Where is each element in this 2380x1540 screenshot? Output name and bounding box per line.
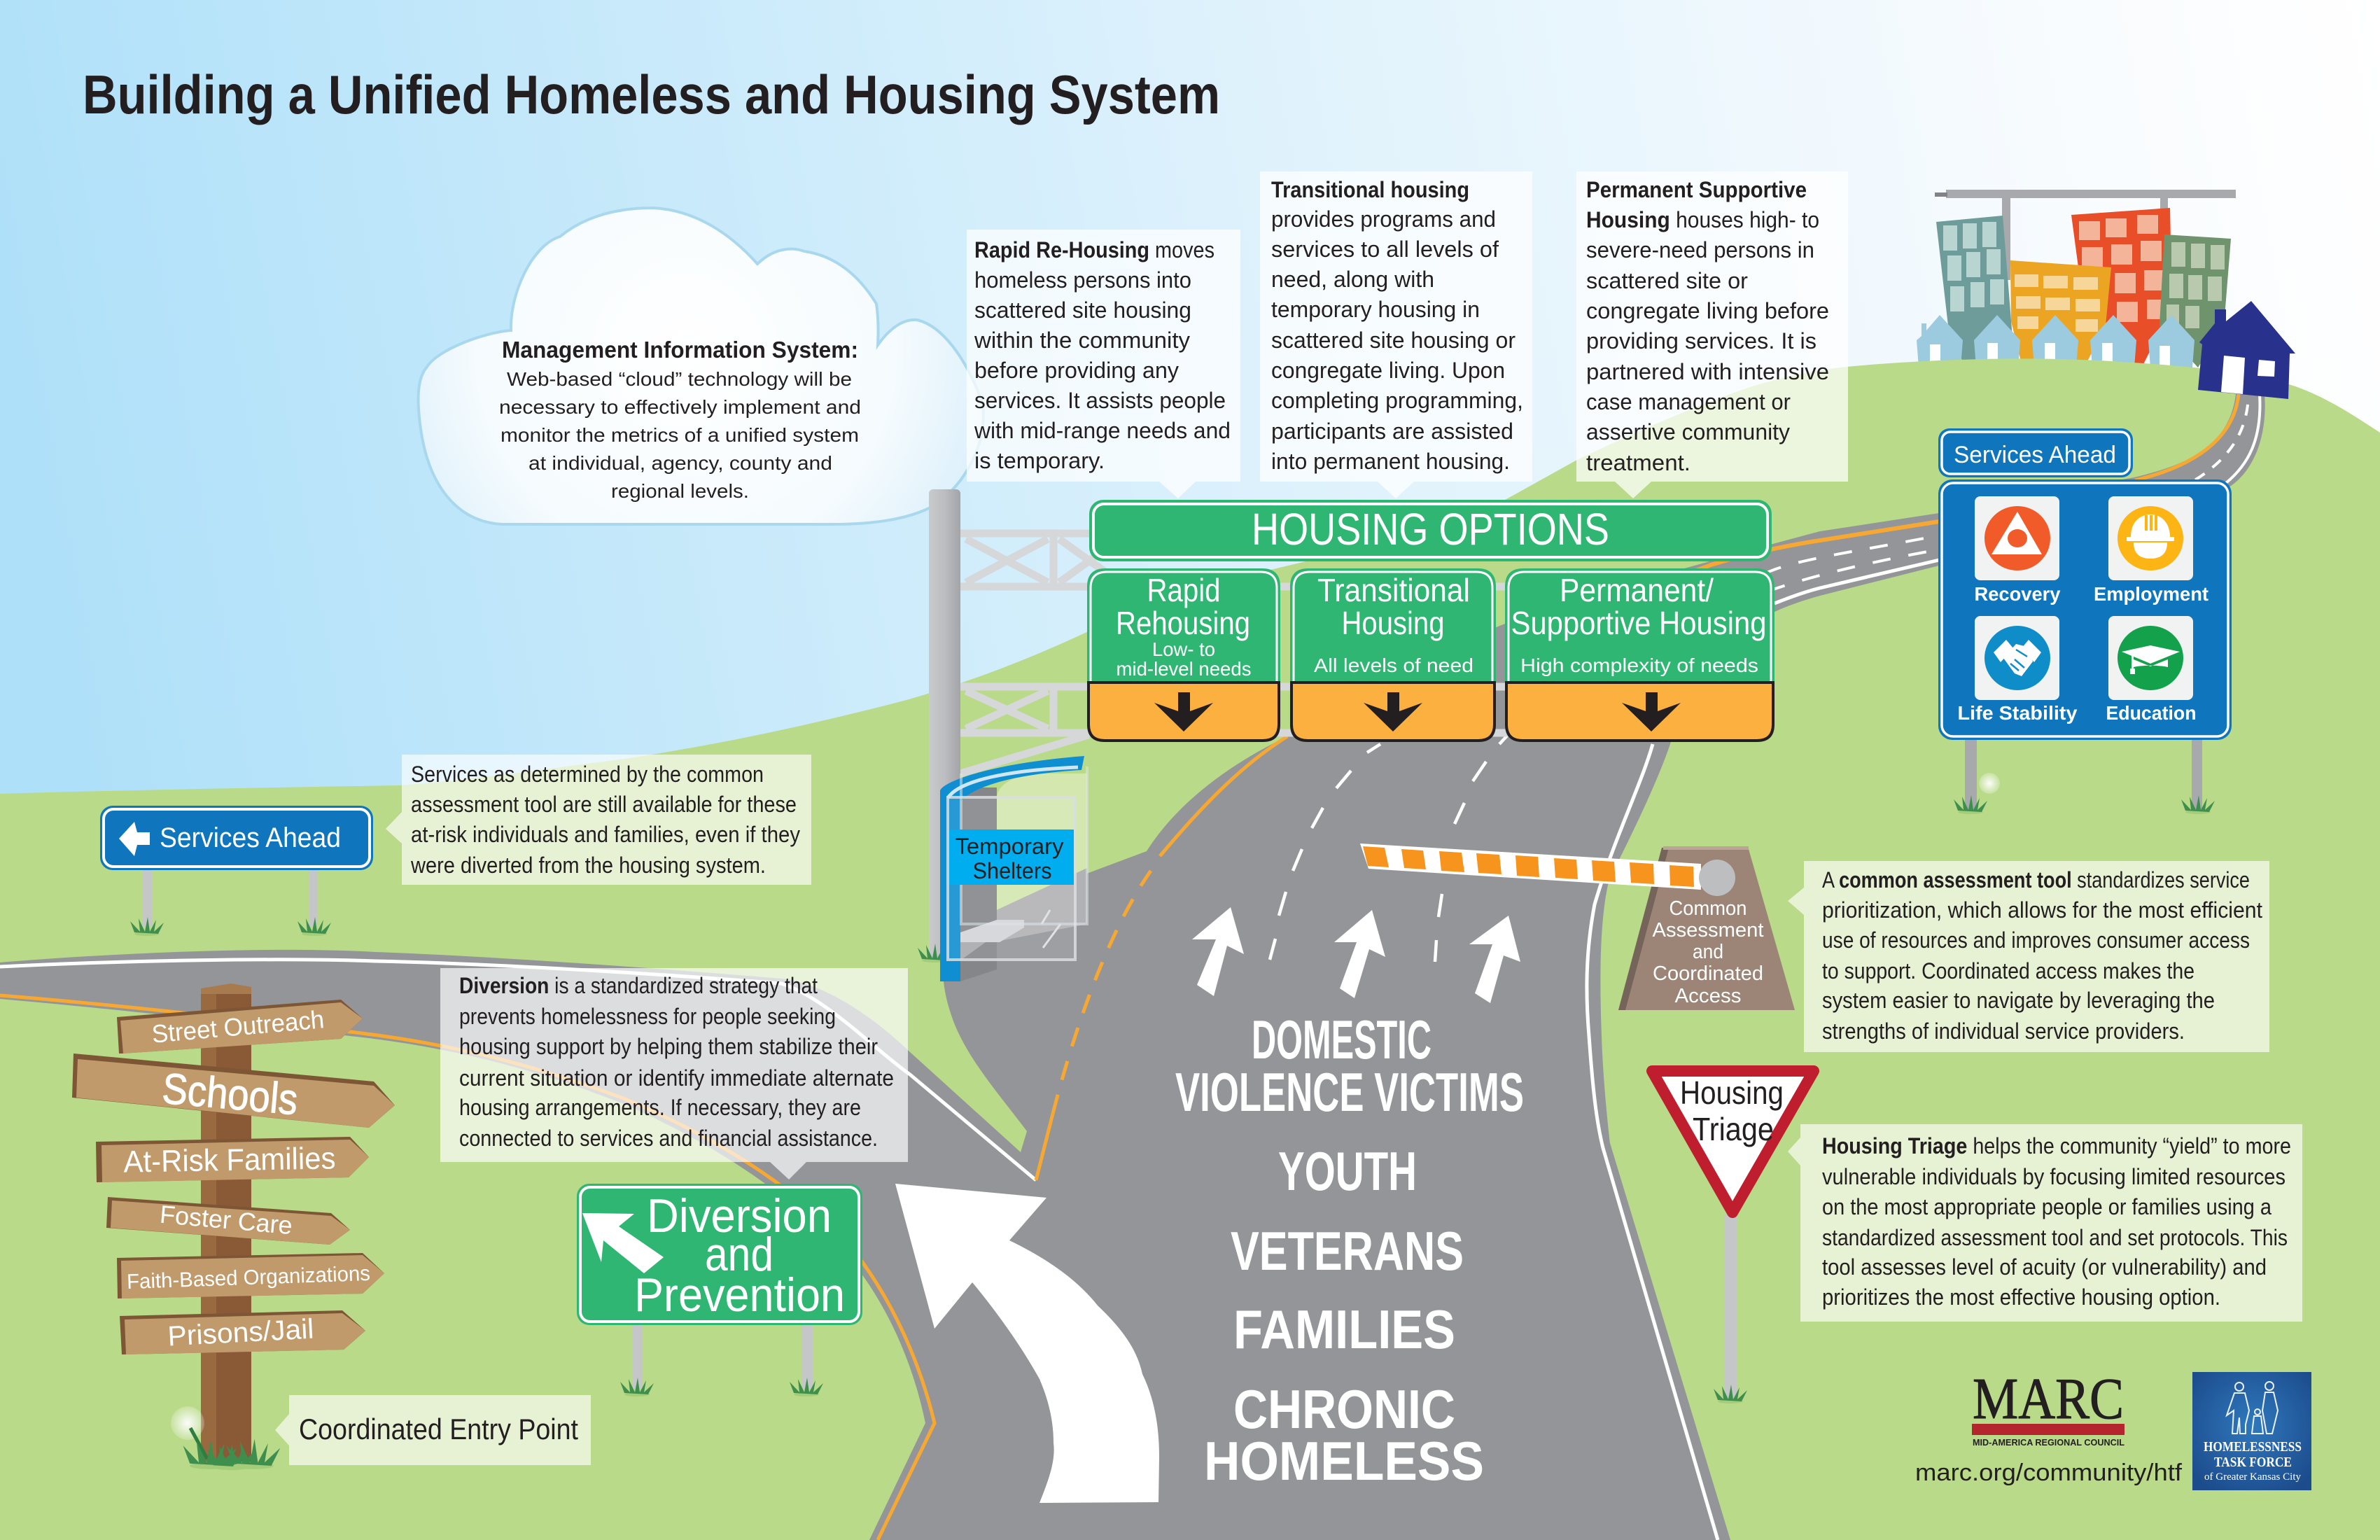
callout: Diversion — [440, 968, 908, 1180]
road text: target populations: FAMILIES — [1233, 1298, 1455, 1360]
sign: Foster Care — [106, 1197, 350, 1245]
sign: Housing Triage yield: Triage — [1693, 1111, 1774, 1147]
callout: Coordinated Entry Point — [275, 1395, 591, 1465]
text box: Transitional housing: Transitional housing — [1271, 177, 1469, 202]
overhead sign: Housing Options — [1089, 500, 1772, 561]
text box: Rapid Re-Housing: services. It assists people — [974, 388, 1226, 413]
text box: Rapid Re-Housing: with mid-range needs and — [974, 418, 1231, 443]
callout: Diversion: prevents homelessness for people seeking — [459, 1004, 836, 1029]
road text: target populations — [1175, 1009, 1524, 1492]
callout: Housing Triage: tool assesses level of acuity (or vulnerability) and — [1822, 1254, 2267, 1280]
sign: Prisons/Jail — [120, 1310, 365, 1354]
text box: Permanent Supportive Housing: severe-need persons in — [1586, 237, 1814, 262]
sign: Diversion and Prevention: and — [705, 1228, 774, 1281]
sign: Permanent Supportive Housing: Supportive Housing — [1511, 605, 1767, 641]
callout: services still available — [386, 755, 811, 885]
icon: Recovery: Recovery — [1974, 583, 2061, 605]
road text: target populations: VETERANS — [1231, 1220, 1464, 1282]
text box: Permanent Supportive Housing: assertive community — [1586, 419, 1790, 444]
callout: services still available: at-risk individuals and families, even if they — [411, 822, 800, 847]
road text: target populations: YOUTH — [1278, 1140, 1417, 1202]
shelter sign: Temporary — [955, 834, 1064, 859]
text box: Rapid Re-Housing: scattered site housing — [974, 298, 1191, 323]
callout: common assessment tool: use of resources and improves consumer access — [1822, 927, 2250, 953]
callout: common assessment tool — [1788, 861, 2269, 1052]
road network — [0, 394, 2265, 1540]
sign: Transitional Housing — [1290, 568, 1496, 741]
common assessment pedestal: Common — [1669, 897, 1747, 920]
big curved diversion arrow — [895, 1184, 1159, 1503]
common assessment pedestal: and — [1693, 941, 1723, 963]
text box: Permanent Supportive Housing: scattered site or — [1586, 268, 1748, 293]
text box: Permanent Supportive Housing: providing services. It is — [1586, 328, 1816, 354]
sign: Transitional Housing: Transitional — [1317, 572, 1470, 608]
panel: Services Ahead sign, right — [1938, 428, 2232, 814]
text box: Transitional housing: provides programs and — [1271, 206, 1496, 232]
callout: Diversion: Diversion is a standardized strategy that — [459, 973, 818, 998]
callout: services still available: were diverted from the housing system. — [410, 853, 766, 878]
logo: Homelessness Task Force — [2192, 1372, 2311, 1490]
logo: MARC: MID-AMERICA REGIONAL COUNCIL — [1973, 1437, 2124, 1448]
road text: target populations: DOMESTIC — [1252, 1009, 1432, 1070]
common assessment pedestal — [1618, 846, 1795, 1010]
panel: Services Ahead sign, right: Services Ahead — [1954, 442, 2116, 468]
text box: Transitional housing: participants are assisted — [1271, 419, 1513, 444]
shelter sign — [949, 830, 1074, 885]
text box: Transitional housing: services to all levels of — [1271, 237, 1499, 262]
sign: Transitional Housing: Housing — [1341, 605, 1445, 641]
cloud text: Management Information System: at individual, agency, county and — [528, 452, 832, 474]
callout: Housing Triage: vulnerable individuals by focusing limited resources — [1822, 1164, 2286, 1189]
website url: marc.org/community/htf — [1915, 1460, 2183, 1486]
illustration: cloud shape — [419, 208, 983, 524]
icon: Recovery — [1974, 496, 2061, 605]
wooden signpost: coordinated entry points — [72, 983, 395, 1470]
common assessment pedestal: Assessment — [1652, 919, 1764, 941]
callout: Housing Triage: standardized assessment tool and set protocols. This — [1822, 1225, 2288, 1250]
sign: Housing Triage yield: Housing — [1680, 1074, 1784, 1111]
callout: services still available: Services as determined by the common — [411, 762, 764, 787]
text box: Transitional housing: scattered site housing or — [1271, 328, 1516, 353]
text box: Transitional housing: completing programming, — [1271, 388, 1523, 413]
sign: Diversion and Prevention — [577, 1184, 862, 1396]
cloud text: Management Information System: Management Information System: — [502, 337, 858, 363]
logo: Homelessness Task Force: of Greater Kansas City — [2204, 1471, 2301, 1483]
icon: Education: Education — [2106, 702, 2197, 724]
sign: Services Ahead, left — [100, 806, 373, 936]
cloud text: Management Information System: monitor the metrics of a unified system — [500, 424, 859, 446]
callout: common assessment tool: A common assessment tool standardizes service — [1822, 867, 2250, 892]
text box: Rapid Re-Housing: within the community — [974, 328, 1190, 353]
callout: common assessment tool: to support. Coordinated access makes the — [1822, 958, 2194, 983]
bus shelter: Temporary Shelters — [940, 756, 1087, 981]
common assessment pedestal: Coordinated — [1653, 962, 1763, 985]
sign: Permanent Supportive Housing — [1505, 568, 1774, 741]
icon: Life Stability — [1957, 616, 2078, 724]
callout: Housing Triage: prioritizes the most effective housing option. — [1822, 1284, 2220, 1310]
text box: Transitional housing: congregate living. Upon — [1271, 358, 1505, 383]
callout: Coordinated Entry Point: Coordinated Entry Point — [299, 1413, 578, 1446]
sign: Rapid Rehousing: Rapid — [1147, 572, 1221, 608]
road text: target populations: VIOLENCE VICTIMS — [1175, 1061, 1524, 1123]
logo: Homelessness Task Force: TASK FORCE — [2214, 1455, 2292, 1470]
text box: Rapid Re-Housing: before providing any — [974, 358, 1179, 383]
text box: Rapid Re-Housing: is temporary. — [974, 448, 1105, 473]
sign: Rapid Rehousing: mid-level needs — [1116, 658, 1252, 680]
icon: Employment: Employment — [2094, 583, 2208, 605]
text box: Permanent Supportive Housing: Housing houses high- to — [1586, 207, 1819, 232]
icon: Life Stability: Life Stability — [1957, 702, 2078, 724]
illustration: city skyline with billboard — [1917, 190, 2236, 368]
sign: Street Outreach — [117, 1000, 363, 1054]
sign: Services Ahead, left: Services Ahead — [160, 822, 341, 853]
common assessment pedestal: Access — [1674, 985, 1742, 1007]
sign: Diversion and Prevention: Prevention — [634, 1268, 845, 1322]
callout: common assessment tool: strengths of individual service providers. — [1822, 1018, 2185, 1044]
callout: Diversion: housing support by helping them stabilize their — [459, 1034, 878, 1059]
sign: Permanent Supportive Housing: High complexity of needs — [1520, 654, 1758, 676]
sign: Rapid Rehousing: Rehousing — [1116, 605, 1250, 641]
sign: Prisons/Jail: Prisons/Jail — [167, 1314, 314, 1352]
sign: Rapid Rehousing: Low- to — [1152, 638, 1215, 660]
callout: Diversion: connected to services and financial assistance. — [459, 1126, 878, 1151]
callout: Housing Triage: Housing Triage helps the community “yield” to more — [1822, 1133, 2291, 1158]
callout: Diversion: current situation or identify immediate alternate — [459, 1065, 894, 1091]
callout: common assessment tool: prioritization, which allows for the most efficient — [1822, 897, 2262, 923]
logo: MARC: MARC — [1973, 1366, 2124, 1432]
text box: Transitional housing — [1260, 172, 1532, 498]
callout: services still available: assessment tool are still available for these — [411, 792, 797, 817]
cloud text: Management Information System — [499, 337, 861, 502]
sign: Foster Care: Foster Care — [159, 1200, 293, 1240]
text box: Transitional housing: need, along with — [1271, 267, 1434, 292]
cloud text: Management Information System: necessary to effectively implement and — [499, 396, 861, 418]
road arrows — [1192, 907, 1520, 1003]
gate barrier arm — [1360, 844, 1735, 896]
text box: Permanent Supportive Housing: Permanent Supportive — [1586, 177, 1807, 202]
icon: Education — [2106, 616, 2197, 724]
callout: Housing Triage — [1788, 1124, 2302, 1322]
sign: Transitional Housing: All levels of need — [1314, 654, 1474, 676]
text box: Rapid Re-Housing: Rapid Re-Housing moves — [974, 237, 1214, 262]
green hills — [0, 358, 2380, 1540]
road text: target populations: HOMELESS — [1204, 1430, 1484, 1492]
text box: Permanent Supportive Housing: partnered with intensive — [1586, 359, 1829, 384]
cloud text: Management Information System: Web-based “cloud” technology will be — [507, 368, 852, 390]
sign: Schools: Schools — [160, 1065, 300, 1124]
text box: Rapid Re-Housing: homeless persons into — [974, 267, 1191, 293]
road text: target populations: CHRONIC — [1233, 1378, 1455, 1440]
sign: Permanent Supportive Housing: Permanent/ — [1560, 572, 1714, 608]
sign: Diversion and Prevention: Diversion — [647, 1189, 832, 1242]
navy destination house — [2198, 301, 2295, 399]
title: Building a Unified Homeless and Housing System — [83, 64, 1220, 125]
sign: Housing Triage yield — [1652, 1071, 1814, 1404]
sign: Rapid Rehousing — [1087, 568, 1280, 741]
text box: Permanent Supportive Housing: treatment. — [1586, 450, 1690, 475]
sign: Street Outreach: Street Outreach — [150, 1004, 326, 1049]
text box: Rapid Re-Housing — [967, 230, 1240, 498]
sign: Faith-Based Organizations — [117, 1253, 384, 1298]
icon: Employment — [2094, 496, 2208, 605]
overhead sign truss and pole — [918, 489, 1596, 962]
logo: Homelessness Task Force: HOMELESSNESS — [2204, 1439, 2302, 1455]
sign: At-Risk Families — [96, 1137, 369, 1182]
text box: Transitional housing: into permanent housing. — [1271, 449, 1510, 474]
cloud text: Management Information System: regional levels. — [611, 480, 749, 502]
sign: Faith-Based Organizations: Faith-Based Organizations — [127, 1262, 370, 1294]
callout: Diversion: housing arrangements. If necessary, they are — [459, 1095, 861, 1120]
shelter sign: Shelters — [973, 858, 1051, 883]
text box: Transitional housing: temporary housing in — [1271, 297, 1480, 322]
text box: Permanent Supportive Housing: case management or — [1586, 389, 1791, 414]
text box: Permanent Supportive Housing — [1576, 172, 1848, 498]
text box: Permanent Supportive Housing: congregate living before — [1586, 298, 1829, 323]
callout: Housing Triage: on the most appropriate people or families using a — [1822, 1194, 2272, 1219]
overhead sign: Housing Options: HOUSING OPTIONS — [1252, 504, 1609, 554]
callout: common assessment tool: system easier to navigate by leveraging the — [1822, 988, 2215, 1013]
sign: Schools — [72, 1054, 395, 1128]
sign: At-Risk Families: At-Risk Families — [123, 1141, 336, 1180]
